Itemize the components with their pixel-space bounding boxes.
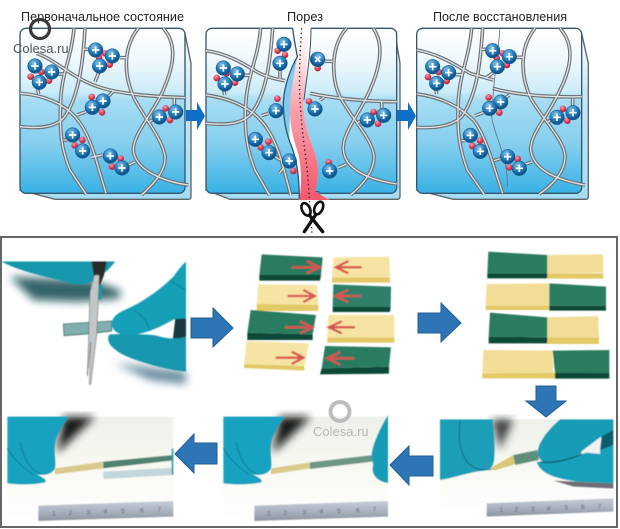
polymer fibers bbox=[206, 28, 397, 195]
ruler: 1 bbox=[267, 510, 271, 517]
watermark: top Colesa.ru bbox=[13, 20, 69, 56]
joined strip 1 bbox=[487, 252, 603, 279]
title: cut: Порез bbox=[287, 9, 323, 24]
ruler: 1 bbox=[52, 510, 56, 517]
photo: healed strip, second view bbox=[223, 415, 388, 523]
ruler: 6 bbox=[581, 504, 585, 511]
panel frame bbox=[206, 28, 400, 199]
strip pair 1 bbox=[259, 254, 390, 283]
arrow: joined strips down bbox=[526, 386, 566, 417]
title: initial state: Первоначальное состояние bbox=[21, 9, 184, 24]
crack bbox=[283, 27, 329, 200]
cut line bbox=[300, 28, 312, 233]
ruler: 7 bbox=[373, 507, 377, 514]
ruler: 7 bbox=[157, 507, 161, 514]
ruler: 2 bbox=[284, 510, 288, 517]
lower shadow bbox=[115, 363, 186, 384]
scissor blades bbox=[87, 275, 99, 384]
scissor handle bbox=[92, 262, 107, 285]
photo: cutting the strip bbox=[2, 262, 186, 384]
red arrows bbox=[276, 261, 362, 365]
molecules bbox=[27, 43, 183, 175]
white gap between fingers bbox=[150, 319, 175, 338]
left glove bbox=[223, 417, 284, 484]
ruler: 6 bbox=[356, 507, 360, 514]
joined strip 2 bbox=[486, 283, 606, 311]
ruler: 2 bbox=[68, 510, 72, 517]
title: after recovery: После восстановления bbox=[433, 9, 567, 24]
ruler: 3 bbox=[303, 509, 307, 516]
background bbox=[7, 417, 173, 523]
ruler: 5 bbox=[337, 508, 341, 515]
upper glove bbox=[2, 262, 115, 284]
left glove bbox=[7, 417, 68, 484]
photo: healed strip, final view bbox=[7, 417, 173, 523]
ruler: 4 bbox=[547, 505, 551, 512]
arrow: initial state to cut bbox=[186, 102, 205, 130]
ruler: 1 bbox=[499, 507, 503, 514]
joined strip 4 bbox=[482, 350, 609, 379]
panel frame bbox=[20, 28, 191, 199]
ruler bbox=[254, 501, 388, 521]
watermark: bottom Colesa.ru bbox=[313, 402, 369, 439]
arrow: photo 1 to strips bbox=[191, 308, 233, 347]
upper finger bbox=[112, 262, 186, 335]
ruler: 6 bbox=[140, 507, 144, 514]
dark gap between fingers bbox=[173, 318, 186, 340]
hand shadow bbox=[10, 277, 120, 302]
shadow bbox=[273, 417, 311, 453]
lower finger bbox=[108, 334, 186, 372]
panel: recovered diagram bbox=[417, 28, 588, 199]
ruler: 3 bbox=[87, 509, 91, 516]
arrow: strips to joined strips bbox=[418, 303, 461, 342]
background bbox=[440, 419, 613, 517]
ruler bbox=[487, 498, 613, 517]
ruler: 4 bbox=[103, 509, 107, 516]
panel: photo sequence frame bbox=[1, 237, 617, 527]
cut strip bbox=[63, 321, 112, 336]
finger crease bbox=[133, 280, 186, 330]
ruler: 7 bbox=[598, 503, 602, 510]
arrow: cut to recovered bbox=[397, 102, 416, 130]
strip bbox=[55, 455, 173, 474]
background bbox=[223, 417, 388, 523]
joined strip 3 bbox=[489, 313, 599, 344]
photo: joined strips bbox=[482, 252, 609, 379]
polymer fibers bbox=[417, 28, 585, 194]
shadow bbox=[57, 417, 95, 453]
panel frame bbox=[417, 28, 588, 199]
right glove bbox=[538, 419, 613, 462]
left glove bbox=[440, 419, 495, 480]
photo: stretching the healed strip bbox=[440, 419, 613, 517]
strip bbox=[271, 455, 373, 474]
strip bbox=[490, 450, 539, 471]
strip pair 4 bbox=[244, 341, 391, 374]
icon: scissors bbox=[300, 200, 325, 232]
polymer fibers bbox=[20, 28, 188, 195]
ruler: 3 bbox=[531, 506, 535, 513]
ruler: 5 bbox=[564, 505, 568, 512]
ruler: 4 bbox=[319, 509, 323, 516]
watermark: top Colesa.ru: Colesa.ru bbox=[13, 41, 69, 56]
strip reflection bbox=[103, 468, 173, 479]
ruler: 2 bbox=[514, 507, 518, 514]
right glove bbox=[372, 415, 388, 483]
molecules bbox=[425, 43, 580, 176]
strip pair 2 bbox=[257, 284, 391, 312]
strip pair 3 bbox=[247, 310, 394, 343]
panel: initial state diagram bbox=[20, 28, 191, 199]
arrow: photo 2 to photo 1 bbox=[175, 434, 217, 473]
hand shadow bbox=[553, 481, 613, 489]
shadow bbox=[492, 419, 513, 450]
molecules bbox=[213, 37, 391, 178]
ruler bbox=[38, 501, 173, 521]
ruler: 5 bbox=[121, 508, 125, 515]
right glove edge bbox=[172, 448, 173, 475]
arrow: stretch to photo 2 bbox=[390, 446, 433, 485]
photo: separated strips with red arrows bbox=[244, 254, 394, 374]
panel: cut diagram bbox=[206, 27, 400, 233]
watermark: bottom Colesa.ru: Colesa.ru bbox=[313, 424, 369, 439]
